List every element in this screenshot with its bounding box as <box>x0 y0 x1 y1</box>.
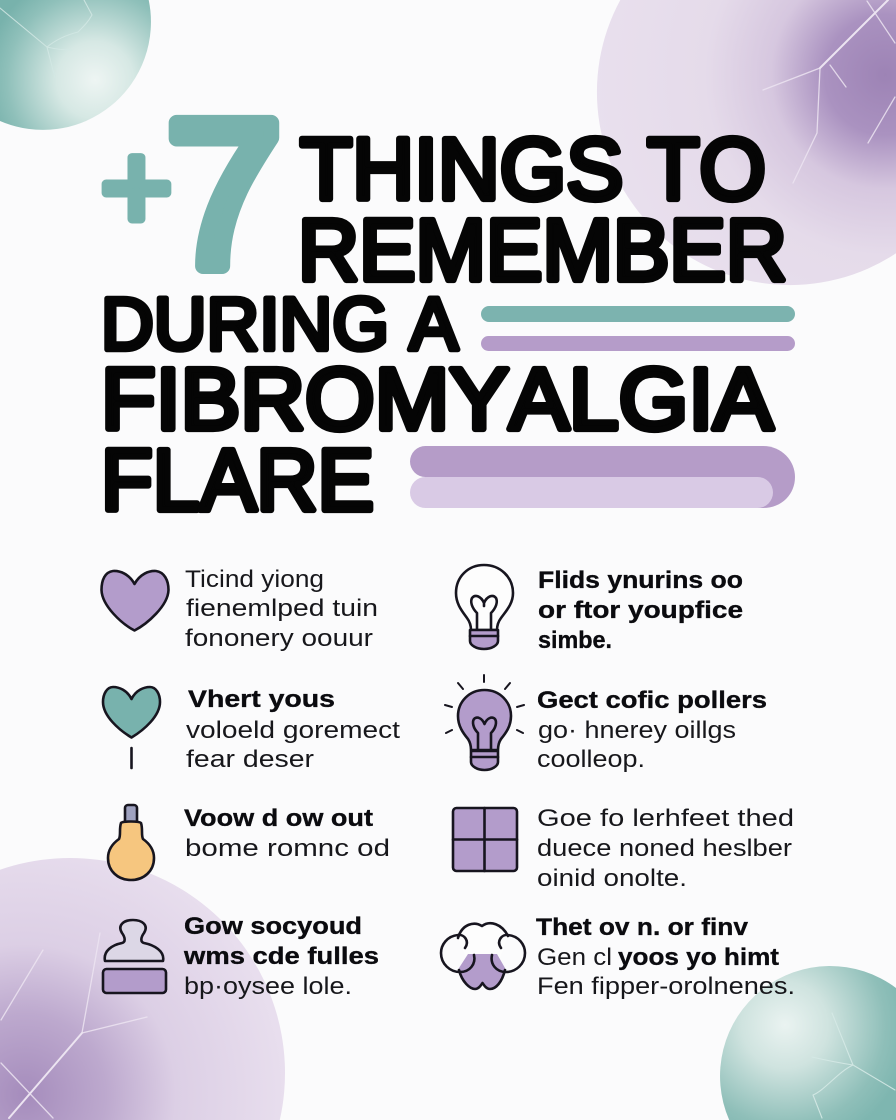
item 3 <box>108 805 390 880</box>
text block: Vhert yous <box>188 686 335 713</box>
text block: fononery oouur <box>185 625 373 652</box>
text block: bome romnc od <box>185 835 390 862</box>
icon: teal heart with stem <box>103 687 160 768</box>
decorative bars: stacked purple <box>410 446 795 508</box>
text block: Gow socyoud <box>184 913 362 940</box>
text block <box>536 914 795 1000</box>
text block <box>537 687 767 773</box>
text block <box>186 686 400 773</box>
leaf circle: bottom right <box>720 966 896 1120</box>
text block: bp·oysee lole. <box>184 973 352 1000</box>
text block: simbe. <box>538 627 612 654</box>
text block <box>537 805 794 892</box>
text block: Goe fo lerhfeet thed <box>537 805 794 832</box>
text block: or ftor youpfice <box>538 597 743 624</box>
text block <box>184 805 390 862</box>
title line: flare: FLARE <box>101 432 374 529</box>
icon: purple heart <box>102 571 168 630</box>
leaf circle: bottom left <box>0 858 285 1120</box>
icon: stamp <box>103 920 166 993</box>
text block: wms cde fulles <box>183 943 379 970</box>
text block <box>185 566 378 652</box>
title line: things to: THINGS TO <box>300 121 766 218</box>
text block: voloeld goremect <box>186 717 400 744</box>
text block: coolleop. <box>537 746 645 773</box>
text block: Flids ynurins oo <box>538 567 743 594</box>
text block: go· hnerey oillgs <box>538 717 736 744</box>
title accent: +7: + <box>100 118 173 257</box>
item 4 <box>103 913 379 1000</box>
icon: four-pane grid <box>453 808 517 871</box>
title line: remember: REMEMBER <box>298 202 787 299</box>
text block <box>183 913 379 1000</box>
icon: glowing purple bulb <box>445 675 524 770</box>
text block: Ticind yiong <box>185 566 324 593</box>
item 8 <box>441 914 795 1000</box>
text block: fear deser <box>186 746 314 773</box>
item 6 <box>445 675 767 773</box>
text block: duece noned heslber <box>537 835 792 862</box>
item 5 <box>456 565 743 654</box>
text block: Thet ov n. or finv <box>536 914 748 941</box>
item 7 <box>453 805 794 892</box>
text block: Voow d ow out <box>184 805 373 832</box>
text block: Fen fipper-orolnenes. <box>537 973 795 1000</box>
icon: light bulb outline <box>456 565 513 649</box>
title <box>100 79 787 529</box>
text block: fienemlped tuin <box>186 595 378 622</box>
title accent: +7 <box>100 79 282 311</box>
leaf circle: top right <box>597 0 896 285</box>
icon: bottle <box>108 805 154 880</box>
text block <box>538 567 743 654</box>
leaf circle: top left <box>0 0 151 130</box>
text block: Gect cofic pollers <box>537 687 767 714</box>
title accent: +7: 7 <box>166 79 282 311</box>
text block: Gen cl <box>537 944 612 971</box>
icon: brain <box>441 923 525 989</box>
decorative bars: teal and purple <box>481 306 795 351</box>
title line: fibromyalgia: FIBROMYALGIA <box>101 351 773 448</box>
item 2 <box>103 686 400 773</box>
text block: yoos yo himt <box>618 944 779 971</box>
text block: oinid onolte. <box>537 865 687 892</box>
title line: during a: DURING A <box>101 282 459 366</box>
item 1 <box>102 566 378 652</box>
